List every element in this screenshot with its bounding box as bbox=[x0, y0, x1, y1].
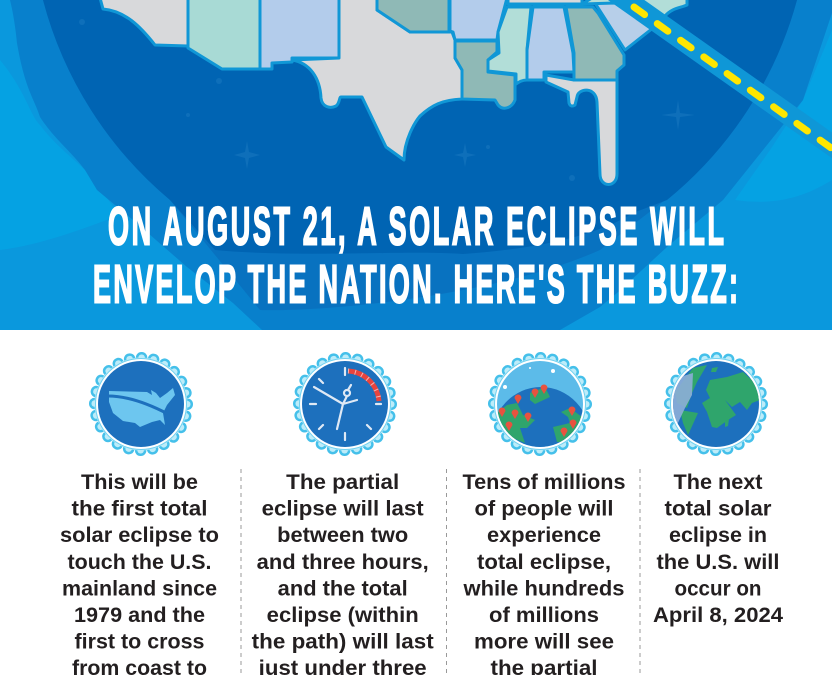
text block: millions of viewers: more will see bbox=[474, 631, 614, 654]
text block: eclipse duration: and three hours, bbox=[257, 551, 429, 574]
text block: next eclipse bbox=[653, 471, 783, 627]
text block: millions of viewers: total eclipse, bbox=[477, 551, 611, 574]
panel: blue header background bbox=[0, 0, 832, 330]
state: aqua bbox=[188, 0, 260, 69]
text block: next eclipse: eclipse in bbox=[669, 524, 767, 547]
text block: next eclipse: April 8, 2024 bbox=[653, 604, 783, 627]
state: Arkansas light blue bbox=[450, 0, 507, 40]
map: southern United States bbox=[100, 0, 687, 184]
text block: eclipse duration: the path) will last bbox=[252, 631, 434, 654]
title bbox=[94, 206, 736, 304]
path of totality dashes bbox=[634, 7, 832, 160]
text block: first total eclipse: first to cross bbox=[74, 631, 204, 654]
icon: US map badge bbox=[94, 358, 188, 450]
stars bbox=[79, 19, 695, 181]
title: ON AUGUST 21, A SOLAR ECLIPSE WILL bbox=[108, 196, 724, 257]
dark blue circle behind map bbox=[43, 0, 797, 254]
state: light blue bbox=[260, 0, 339, 69]
text block: millions of viewers: while hundreds bbox=[462, 577, 624, 600]
text block: first total eclipse: the first total bbox=[72, 498, 208, 521]
text block: first total eclipse: mainland since bbox=[62, 577, 217, 600]
state: Alabama light blue bbox=[527, 7, 574, 80]
text block: first total eclipse: solar eclipse to bbox=[60, 524, 219, 547]
text block: eclipse duration: eclipse (within bbox=[267, 604, 419, 627]
text block: next eclipse: The next bbox=[674, 471, 762, 494]
text block: next eclipse: occur on bbox=[674, 577, 762, 600]
state: Texas grey bbox=[292, 0, 462, 160]
text block: millions of viewers bbox=[462, 471, 626, 675]
text block: eclipse duration bbox=[252, 471, 434, 675]
text block: first total eclipse: This will be bbox=[81, 471, 198, 494]
state: North Carolina aqua bbox=[508, 0, 582, 4]
icon: crowd on globe badge bbox=[488, 352, 592, 456]
text block: first total eclipse bbox=[60, 471, 219, 675]
text block: eclipse duration: eclipse will last bbox=[262, 498, 424, 521]
icon: clock badge bbox=[298, 358, 392, 450]
state: southwest grey bbox=[100, 0, 188, 46]
text block: next eclipse: the U.S. will bbox=[656, 551, 780, 574]
state: South Carolina light blue bbox=[595, 3, 653, 50]
text block: next eclipse: total solar bbox=[664, 498, 772, 521]
text block: first total eclipse: touch the U.S. bbox=[68, 551, 212, 574]
title: ENVELOP THE NATION. HERE'S THE BUZZ: bbox=[93, 254, 738, 315]
text block: first total eclipse: 1979 and the bbox=[74, 604, 205, 627]
state: teal north of Texas bbox=[377, 0, 449, 32]
state: Florida grey bbox=[546, 75, 617, 184]
icon: globe badge bbox=[670, 358, 762, 450]
text block: millions of viewers: experience bbox=[487, 524, 601, 547]
dashed column dividers bbox=[241, 469, 640, 675]
state: Georgia teal bbox=[566, 7, 624, 80]
path of totality band bbox=[612, 0, 832, 158]
text block: eclipse duration: The partial bbox=[286, 471, 399, 494]
text block: millions of viewers: Tens of millions bbox=[462, 471, 626, 494]
state: Mississippi aqua bbox=[488, 7, 531, 84]
text block: millions of viewers: of millions bbox=[489, 604, 599, 627]
text block: eclipse duration: and the total bbox=[278, 577, 408, 600]
text block: millions of viewers: of people will bbox=[474, 498, 614, 521]
state: Louisiana teal bbox=[455, 41, 515, 108]
text block: eclipse duration: between two bbox=[277, 524, 408, 547]
